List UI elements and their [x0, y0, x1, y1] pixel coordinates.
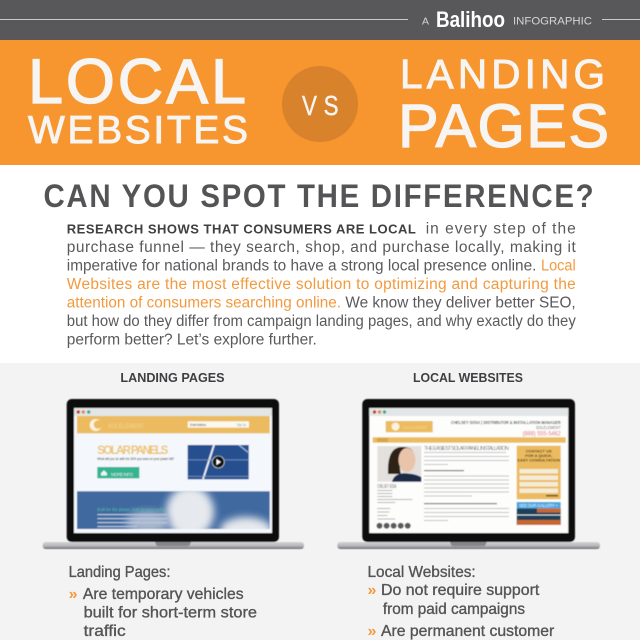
laptop: landing page mockup: Sign Up: [237, 423, 246, 427]
intro paragraph: We know they deliver better SEO,: [345, 295, 576, 312]
laptop: local website mockup: SOLELEMENT: [536, 425, 561, 430]
laptop: landing page mockup: Built for the planet, built for your wallet: [97, 507, 166, 512]
intro paragraph: purchase funnel — they search, shop, and purchase locally, making it: [67, 239, 576, 256]
laptop: local website mockup: CHELSEY SOSA: [377, 484, 397, 490]
text block: landing pages: Are temporary vehicles: [83, 586, 244, 603]
intro paragraph: Local: [541, 258, 576, 275]
laptop: landing page mockup: Email Address: [190, 423, 206, 427]
comparison panel: [0, 363, 640, 640]
text block: local websites: Are permanent customer: [381, 623, 555, 640]
text block: local websites: Do not require support: [381, 582, 540, 599]
laptop: landing page mockup: [43, 399, 304, 549]
laptop: local website mockup: SEE OUR GALLERY »: [519, 503, 559, 508]
title: local websites: LOCAL: [28, 47, 246, 117]
intro paragraph: perform better? Let’s explore further.: [67, 331, 317, 348]
title: local websites: [28, 47, 248, 152]
heading: CAN YOU SPOT THE DIFFERENCE?: [44, 178, 594, 214]
text block: landing pages: »: [69, 586, 78, 603]
laptop: landing page mockup: SOLELEMENT: [108, 424, 144, 430]
intro paragraph: in every step of the: [426, 220, 576, 237]
text block: local websites: »: [368, 623, 376, 640]
intro paragraph: [67, 220, 576, 348]
title: local websites: WEBSITES: [28, 109, 248, 152]
top bar: [0, 0, 640, 40]
title: landing pages: LANDING: [400, 51, 605, 97]
text block: local websites: Local Websites:: [368, 564, 476, 581]
intro paragraph: RESEARCH SHOWS THAT CONSUMERS ARE LOCAL: [67, 221, 416, 236]
intro paragraph: attention of consumers searching online.: [67, 295, 341, 312]
text block: local websites: »: [368, 582, 376, 599]
laptop: local website mockup: CONTACT US: [526, 448, 552, 454]
laptop: local website mockup: FOR A QUICK,: [525, 453, 552, 458]
intro paragraph: but how do they differ from campaign landing pages, and why exactly do they: [67, 313, 576, 330]
column heading: local websites: LOCAL WEBSITES: [413, 371, 523, 385]
laptop: local website mockup: (888) 555-5462: [523, 430, 561, 438]
laptop: local website mockup: [337, 399, 600, 549]
laptop: landing page mockup: What will you do with the 30% you save on your power bill?: [97, 457, 174, 461]
top bar: A: [422, 16, 429, 28]
intro paragraph: Websites are the most effective solution to optimizing and capturing the: [67, 276, 576, 293]
title banner: [0, 40, 640, 165]
title: landing pages: [398, 51, 609, 160]
top bar: INFOGRAPHIC: [513, 16, 592, 28]
vs badge: VS: [302, 91, 339, 122]
laptop: landing page mockup: MORE INFO: [111, 472, 133, 477]
column heading: landing pages: LANDING PAGES: [120, 371, 225, 385]
laptop: local website mockup: THE EASIEST SOLAR PANEL INSTALLATION: [424, 446, 509, 452]
text block: landing pages: built for short-term store: [84, 605, 257, 622]
text block: landing pages: Landing Pages:: [69, 564, 170, 581]
laptop: local website mockup: CHELSEY SOSA | DISTRIBUTOR & INSTALLATION MANAGER: [451, 420, 561, 425]
text block: local websites: [368, 564, 555, 640]
laptop: landing page mockup: SOLAR PANELS: [97, 445, 169, 457]
title: landing pages: PAGES: [398, 92, 609, 160]
text block: landing pages: traffic: [84, 623, 126, 640]
vs badge: [282, 66, 358, 142]
laptop: local website mockup: SOLELEMENT: [403, 425, 427, 430]
text block: local websites: from paid campaigns: [383, 601, 525, 618]
text block: landing pages: [69, 564, 257, 640]
intro paragraph: imperative for national brands to have a strong local presence online.: [67, 258, 536, 275]
laptop: local website mockup: EASY CONSULTATION: [517, 458, 560, 462]
top bar: Balihoo: [436, 7, 505, 32]
